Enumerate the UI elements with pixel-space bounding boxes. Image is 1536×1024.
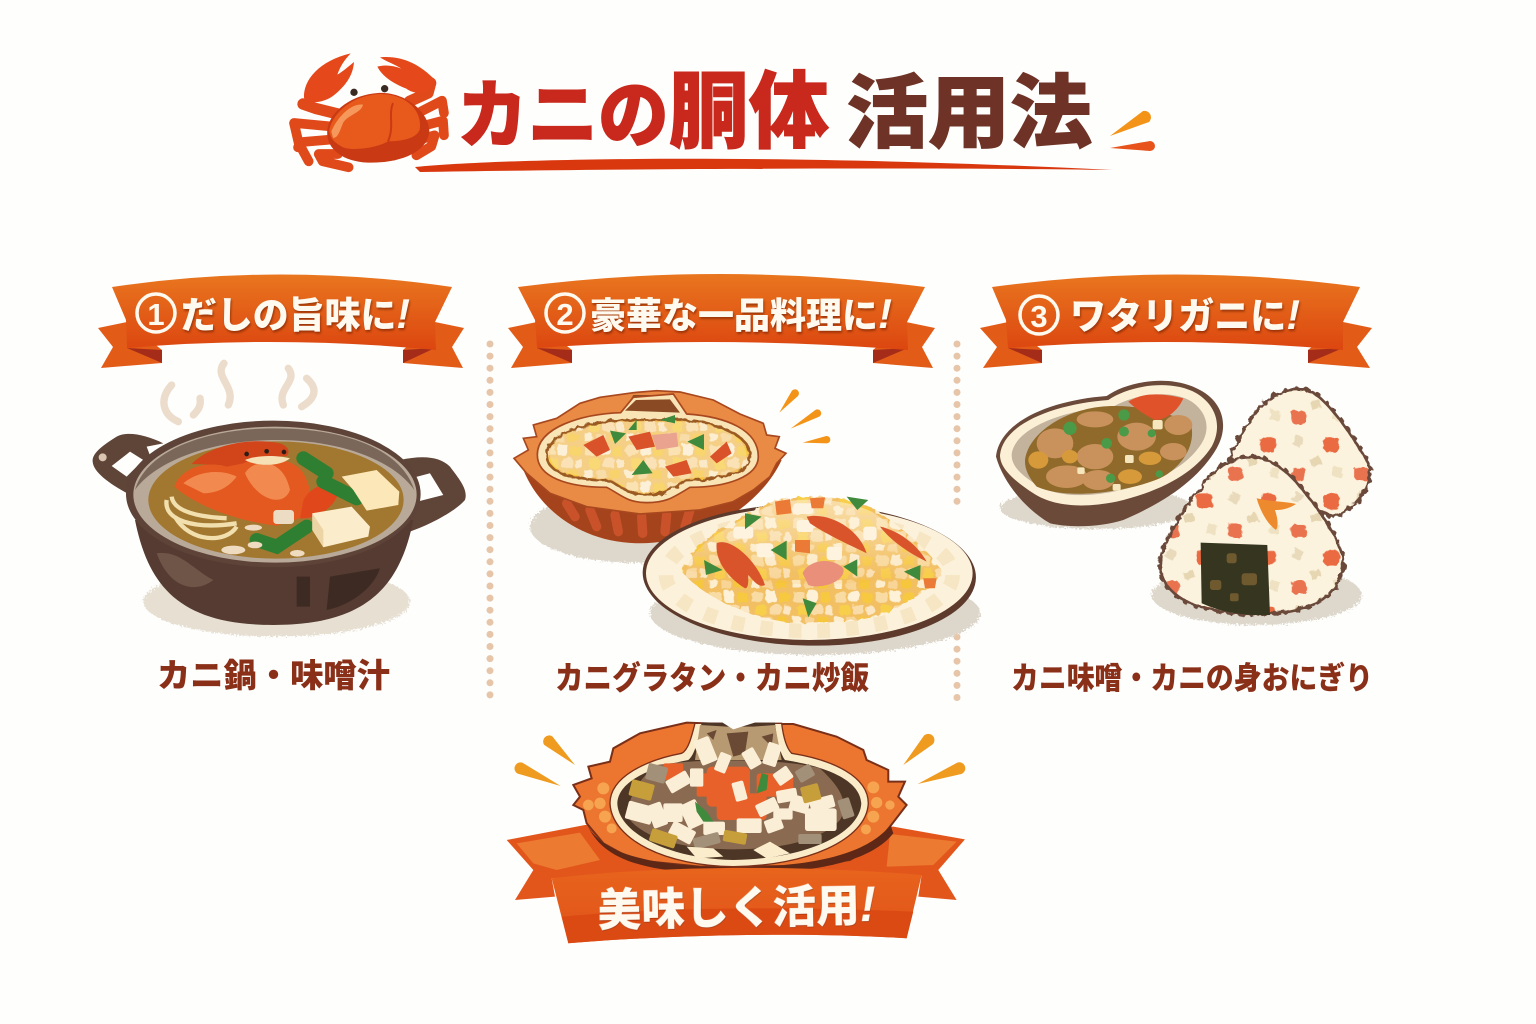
number badge 2: 2 [556, 297, 574, 332]
gratin shell base [520, 460, 782, 543]
bowl inner [1012, 394, 1207, 495]
tofu [312, 470, 399, 547]
shell crack [388, 103, 393, 141]
pot body [135, 520, 413, 625]
crab eyes [350, 85, 388, 96]
back onigiri [1230, 390, 1369, 517]
crab arms [303, 83, 431, 114]
pot inner wall [133, 427, 417, 563]
plate rays [666, 519, 953, 631]
left claw [304, 53, 354, 102]
rice highlights [733, 503, 877, 560]
onigiri shadow [1152, 565, 1362, 625]
gratin toppings [583, 415, 732, 477]
gratin back crack [623, 395, 682, 413]
title brown part: 活用法 [846, 69, 1092, 158]
crab shell [327, 93, 429, 163]
title [457, 65, 1092, 159]
crumb filling [624, 736, 855, 850]
sparkle lines [779, 389, 830, 443]
ribbon tails [980, 322, 1372, 368]
illustration: stuffed crab shell with ribbon [507, 722, 965, 943]
plate surface [646, 507, 973, 640]
shell highlight [329, 94, 420, 149]
ribbon tails [98, 322, 464, 368]
shell stripes [567, 503, 690, 533]
panel: ribbon 2 [508, 274, 935, 368]
bowl rim [1000, 385, 1217, 505]
gratin shell top [514, 391, 786, 514]
title sparks [1110, 111, 1155, 151]
crab claws on rice [716, 516, 927, 588]
pot body wear [157, 553, 213, 587]
soup bits [221, 525, 305, 557]
illustration: crab miso and onigiri [996, 381, 1369, 625]
bowl outer [996, 381, 1223, 526]
number badge 2 [546, 294, 584, 332]
title underline [415, 159, 1112, 172]
number badge 3 [1020, 296, 1058, 334]
gratin shadow [530, 491, 737, 563]
ribbon folds [127, 348, 435, 363]
right claw [377, 57, 435, 93]
ribbon back [507, 825, 965, 900]
illustration: crab gratin and fried rice [514, 389, 980, 655]
spark top [1110, 111, 1151, 136]
crab meat [803, 561, 844, 586]
divider right lower [954, 637, 960, 698]
spark bottom [1110, 141, 1155, 151]
noodles [166, 497, 237, 538]
gratin cream wash [550, 422, 747, 492]
pot body dark wear [297, 568, 380, 610]
ribbon tails [508, 322, 935, 368]
ribbon heading 1: だしの旨味に! [181, 290, 410, 337]
crab topping [1257, 498, 1296, 530]
divider left [486, 344, 494, 698]
crab claw on miso [1128, 394, 1183, 420]
caption 2: カニグラタン・カニ炒飯 [555, 660, 869, 696]
ribbon front shading [562, 908, 913, 943]
panel: ribbon 1 [98, 274, 464, 368]
crab miso [1025, 406, 1192, 494]
gratin cream rim [537, 394, 758, 503]
ribbon mottling [517, 833, 957, 870]
caption 1: カニ鍋・味噌汁 [157, 657, 390, 694]
pot right handle [400, 457, 466, 532]
pot back wall [135, 428, 414, 490]
handle highlight [99, 453, 107, 461]
nori [1201, 543, 1270, 615]
shell outer [573, 723, 907, 867]
pot left handle [93, 434, 163, 498]
pot rim [126, 421, 421, 567]
ribbon band [112, 274, 452, 350]
shell cream rim [610, 723, 868, 867]
ribbon folds [1008, 348, 1343, 363]
icon: crab [294, 53, 444, 167]
ribbon heading 2: 豪華な一品料理に! [590, 290, 892, 337]
shell interior [617, 723, 861, 860]
ribbon heading 3: ワタリガニに! [1070, 291, 1300, 338]
bowl shadow [1000, 488, 1193, 529]
ribbon band [518, 274, 925, 350]
ribbon front band [552, 868, 922, 943]
top innards dark [707, 730, 773, 757]
top crab innards [695, 725, 782, 760]
green onions [257, 458, 357, 547]
number badge 1: 1 [147, 297, 165, 332]
left sparkles [515, 735, 575, 786]
green peppers and carrots [704, 497, 937, 617]
right sparkles [903, 734, 965, 784]
rice wash [687, 500, 937, 584]
illustration: crab hot pot [93, 363, 466, 637]
title red part: カニの胴体 [457, 65, 829, 159]
pot shadow [143, 567, 410, 637]
steam [164, 363, 314, 422]
gratin crab notch [625, 399, 680, 413]
bottom cream patches [687, 842, 790, 858]
gratin filling [547, 420, 750, 495]
shell dark underside [587, 825, 893, 874]
nori highlights [1210, 553, 1257, 601]
shell notch [722, 722, 757, 729]
fried rice pile [682, 496, 942, 623]
crab legs [294, 101, 444, 167]
divider right upper [954, 344, 960, 512]
crab in pot [174, 441, 338, 526]
plate shadow [650, 572, 980, 655]
number badge 3: 3 [1030, 299, 1048, 334]
panel: ribbon 3 [980, 274, 1372, 368]
front onigiri [1160, 457, 1343, 614]
ribbon folds [537, 348, 908, 363]
number badge 1 [137, 294, 175, 332]
caption 3: カニ味噌・カニの身おにぎり [1011, 661, 1373, 696]
soup [148, 441, 404, 559]
banner text: 美味しく活用! [597, 876, 876, 937]
plate [641, 501, 977, 649]
ribbon band [992, 274, 1360, 350]
shell shine [331, 105, 363, 138]
shell spots [583, 781, 895, 834]
